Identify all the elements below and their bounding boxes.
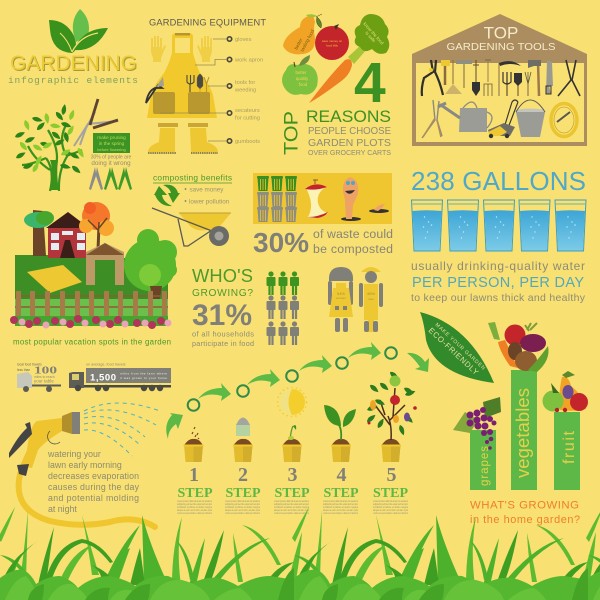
step descriptions: aliqua ut enim ad minim veniam quis	[274, 509, 310, 512]
large truck: 1,500	[90, 372, 116, 384]
step descriptions: aliqua ut enim ad minim veniam quis	[225, 509, 261, 512]
text: watering tip: and potential molding	[48, 493, 139, 503]
step labels: STEP	[373, 486, 408, 501]
garden scene	[10, 202, 177, 329]
icon: woman and man gardeners: women	[336, 296, 346, 300]
large tree	[124, 229, 177, 310]
small truck: local food travels	[17, 362, 42, 366]
lawn	[15, 255, 168, 310]
icon: hose and spray	[9, 403, 160, 527]
step descriptions	[177, 500, 409, 515]
autumn tree	[79, 202, 114, 250]
text: 30 percent: 30% of people are	[91, 154, 132, 160]
text: top reasons: OVER GROCERY CARTS	[308, 150, 391, 157]
heading: composting benefits: composting benefits	[153, 172, 232, 182]
step labels: STEP	[274, 486, 310, 501]
text: who's growing: GROWING?	[192, 288, 253, 299]
tool icons row one	[422, 60, 580, 96]
text: top reasons: GARDEN PLOTS	[308, 138, 391, 149]
water spray	[84, 403, 160, 456]
callout: pruning tip: in the spring	[99, 141, 125, 146]
shears	[74, 99, 118, 146]
heading: top gardening tools: GARDENING TOOLS	[446, 41, 556, 53]
trucks: food miles	[17, 362, 171, 392]
step descriptions: aliqua ut enim ad minim veniam quis	[323, 509, 359, 512]
step labels: STEP	[178, 486, 213, 501]
text: what's growing: WHAT'S GROWING	[470, 500, 579, 512]
step 5	[366, 370, 417, 462]
text: who's growing: of all households	[192, 330, 254, 338]
hammock	[27, 265, 82, 293]
apple: better	[296, 70, 307, 75]
step descriptions: nostrud exercitation ullamco laboris	[225, 512, 261, 515]
carrot	[309, 59, 352, 103]
heading: gardening equipment: GARDENING EQUIPMENT	[149, 18, 266, 28]
text: watering tip: at night	[48, 504, 77, 514]
apple: quality	[296, 76, 309, 81]
equipment labels: gumboots	[235, 139, 260, 145]
step labels: STEP	[226, 486, 261, 501]
equipment labels: gloves	[235, 37, 252, 43]
text: 30 percent	[91, 154, 132, 167]
apple	[282, 55, 318, 95]
heading: top gardening tools	[446, 24, 556, 53]
house	[46, 212, 89, 258]
left tree	[24, 210, 54, 256]
bar chart: what's growing: vegetables	[512, 388, 533, 478]
equipment labels: secateurs	[235, 108, 260, 114]
grapes	[453, 397, 501, 450]
text: what's growing: in the home garden?	[470, 514, 580, 526]
pear: better	[293, 37, 304, 50]
step descriptions: incididunt ut labore et dolore magna	[274, 506, 310, 509]
nozzle	[20, 418, 62, 468]
step descriptions: Lorem ipsum dolor sit amet consectetur	[177, 500, 212, 503]
equipment labels: for cutting	[235, 116, 260, 122]
icon: bins	[257, 176, 297, 222]
step descriptions: incididunt ut labore et dolore magna	[225, 506, 261, 509]
step 2	[233, 418, 253, 462]
large truck: miles from the farm where	[120, 372, 167, 376]
text: watering tip: lawn early morning	[48, 460, 122, 470]
eco-friendly leaf: MAKE YOUR GARDEN	[434, 322, 486, 372]
icon: secateurs row	[89, 167, 132, 190]
step descriptions: aliqua ut enim ad minim veniam quis	[373, 509, 409, 512]
text: water use: to keep our lawns thick and healthy	[411, 292, 586, 304]
hose	[19, 474, 155, 527]
step descriptions: Lorem ipsum dolor sit amet consectetur	[225, 500, 260, 503]
icon: worm	[341, 177, 389, 221]
text: watering tip: watering your	[47, 449, 101, 459]
flowers	[10, 315, 172, 329]
heading: top gardening tools: TOP	[484, 24, 518, 42]
step descriptions: adipiscing elit sed do eiusmod tempor	[274, 503, 309, 506]
step descriptions: adipiscing elit sed do eiusmod tempor	[177, 503, 212, 506]
step descriptions: Lorem ipsum dolor sit amet consectetur	[274, 500, 309, 503]
step descriptions: Lorem ipsum dolor sit amet consectetur	[323, 500, 358, 503]
growth path arrows and circles	[166, 342, 429, 439]
icon: people grid	[266, 271, 299, 345]
title: gardening: GARDENING	[10, 52, 137, 75]
tomato	[315, 24, 349, 60]
step labels: 1	[189, 464, 199, 486]
steps: growing plant	[184, 370, 417, 462]
tool icons row two	[422, 100, 577, 138]
step 4	[324, 405, 356, 462]
small truck: your table	[34, 378, 54, 384]
small truck: less than	[17, 368, 30, 372]
pruning tree	[14, 104, 85, 191]
eco-friendly leaf	[420, 312, 494, 383]
step descriptions: aliqua ut enim ad minim veniam quis	[177, 509, 213, 512]
text: top reasons: PEOPLE CHOOSE	[308, 126, 391, 137]
step descriptions: incididunt ut labore et dolore magna	[177, 506, 213, 509]
grass border	[0, 507, 600, 600]
pear: tasting food	[299, 28, 315, 52]
text: water use: PER PERSON, PER DAY	[412, 275, 584, 291]
apple: food	[299, 82, 308, 87]
text: who's growing	[192, 265, 254, 348]
text: top reasons: REASONS	[306, 107, 391, 126]
text: who's growing: 31%	[192, 299, 252, 332]
step descriptions: nostrud exercitation ullamco laboris	[274, 512, 310, 515]
step descriptions: adipiscing elit sed do eiusmod tempor	[225, 503, 260, 506]
step labels: STEP	[324, 486, 359, 501]
text: water use	[411, 259, 586, 304]
bar chart: what's growing	[453, 322, 588, 490]
step descriptions: nostrud exercitation ullamco laboris	[177, 512, 213, 515]
step descriptions: adipiscing elit sed do eiusmod tempor	[373, 503, 408, 506]
text: watering tip: causes during the day	[48, 482, 140, 492]
text: water use: usually drinking-quality water	[411, 259, 585, 273]
eco-friendly leaf: ECO-FRIENDLY	[427, 326, 481, 377]
logo: leaves	[49, 9, 108, 53]
step descriptions: Lorem ipsum dolor sit amet consectetur	[373, 500, 408, 503]
equipment labels: tools for	[235, 80, 255, 86]
broccoli: know the food	[362, 21, 385, 46]
step descriptions: adipiscing elit sed do eiusmod tempor	[323, 503, 358, 506]
step labels: 2	[238, 464, 248, 486]
text: compost bullets	[185, 186, 230, 206]
bar chart: what's growing: grapes	[479, 446, 491, 486]
text: top reasons	[282, 107, 391, 157]
bar chart: what's growing: fruit	[561, 430, 578, 464]
text: who's growing: participate in food	[192, 339, 254, 348]
text: 238 gallons: 238 GALLONS	[411, 166, 586, 196]
step descriptions: incididunt ut labore et dolore magna	[323, 506, 359, 509]
text: 30 percent waste: be composted	[313, 242, 393, 256]
apron	[146, 33, 217, 118]
callout: pruning tip: make pruning	[97, 135, 126, 140]
text: 30 percent: doing it wrong	[91, 160, 131, 167]
callout: pruning tip	[93, 133, 130, 153]
gazebo	[86, 243, 124, 285]
step descriptions: incididunt ut labore et dolore magna	[373, 506, 409, 509]
equipment labels: work apron	[234, 58, 263, 64]
vegetables	[488, 322, 549, 372]
icon: woman and man gardeners: 46%	[367, 291, 375, 296]
icon: apple core	[305, 180, 328, 218]
text: 30 percent waste	[253, 227, 393, 258]
icon: woman and man gardeners	[329, 267, 381, 332]
broccoli	[348, 14, 389, 64]
step 3	[278, 388, 306, 462]
text: top reasons: TOP	[282, 111, 302, 155]
text: watering tip: decreases evaporation	[48, 471, 139, 481]
glasses of water	[412, 200, 586, 251]
number 4: 4	[354, 51, 386, 115]
caption: garden spots: most popular vacation spots in the garden	[13, 338, 171, 346]
text: who's growing: WHO'S	[192, 265, 253, 286]
large truck: it was grown to your home	[120, 376, 167, 380]
equipment labels: weeding	[234, 88, 256, 94]
text: 30 percent waste: 30%	[253, 227, 309, 258]
small truck: miles to reach	[34, 375, 55, 379]
fruit and veg reasons	[282, 14, 389, 103]
small truck	[17, 362, 61, 392]
text: compost bullets: lower pollution	[189, 198, 230, 206]
step labels: 5	[386, 464, 396, 486]
icon: recycle arrows	[154, 185, 180, 206]
step 1	[184, 427, 204, 462]
subtitle: infographic elements	[8, 75, 138, 86]
tomato: food bills	[326, 44, 338, 48]
title: gardening: GARDENING	[11, 53, 138, 76]
large truck	[69, 362, 171, 391]
step labels	[178, 464, 408, 501]
tomato: save money on	[322, 39, 342, 43]
icon: woman and man gardeners: men	[368, 297, 374, 301]
step descriptions: nostrud exercitation ullamco laboris	[373, 512, 409, 515]
callout: pruning tip: before flowering	[97, 147, 126, 152]
small truck: 100	[34, 366, 57, 376]
text: watering tip	[47, 449, 140, 514]
step descriptions: nostrud exercitation ullamco laboris	[323, 512, 359, 515]
text: what's growing	[470, 500, 580, 526]
text: compost bullets: save money	[190, 186, 224, 194]
panel: waste	[253, 173, 392, 224]
pear	[283, 14, 322, 54]
gumboots	[148, 123, 218, 153]
panel: top gardening tools shed	[412, 14, 587, 146]
fruit	[542, 371, 588, 412]
large truck: on average, food travels	[86, 362, 126, 366]
step labels: 4	[336, 464, 346, 486]
fence	[15, 291, 168, 319]
equipment labels	[160, 37, 263, 145]
text: 30 percent waste: of waste could	[313, 227, 393, 241]
broccoli: is safe	[364, 30, 377, 44]
icon: wheelbarrow	[152, 208, 231, 246]
gloves	[151, 36, 212, 62]
icon: woman and man gardeners: 54%	[337, 291, 345, 296]
step labels: 3	[288, 464, 298, 486]
